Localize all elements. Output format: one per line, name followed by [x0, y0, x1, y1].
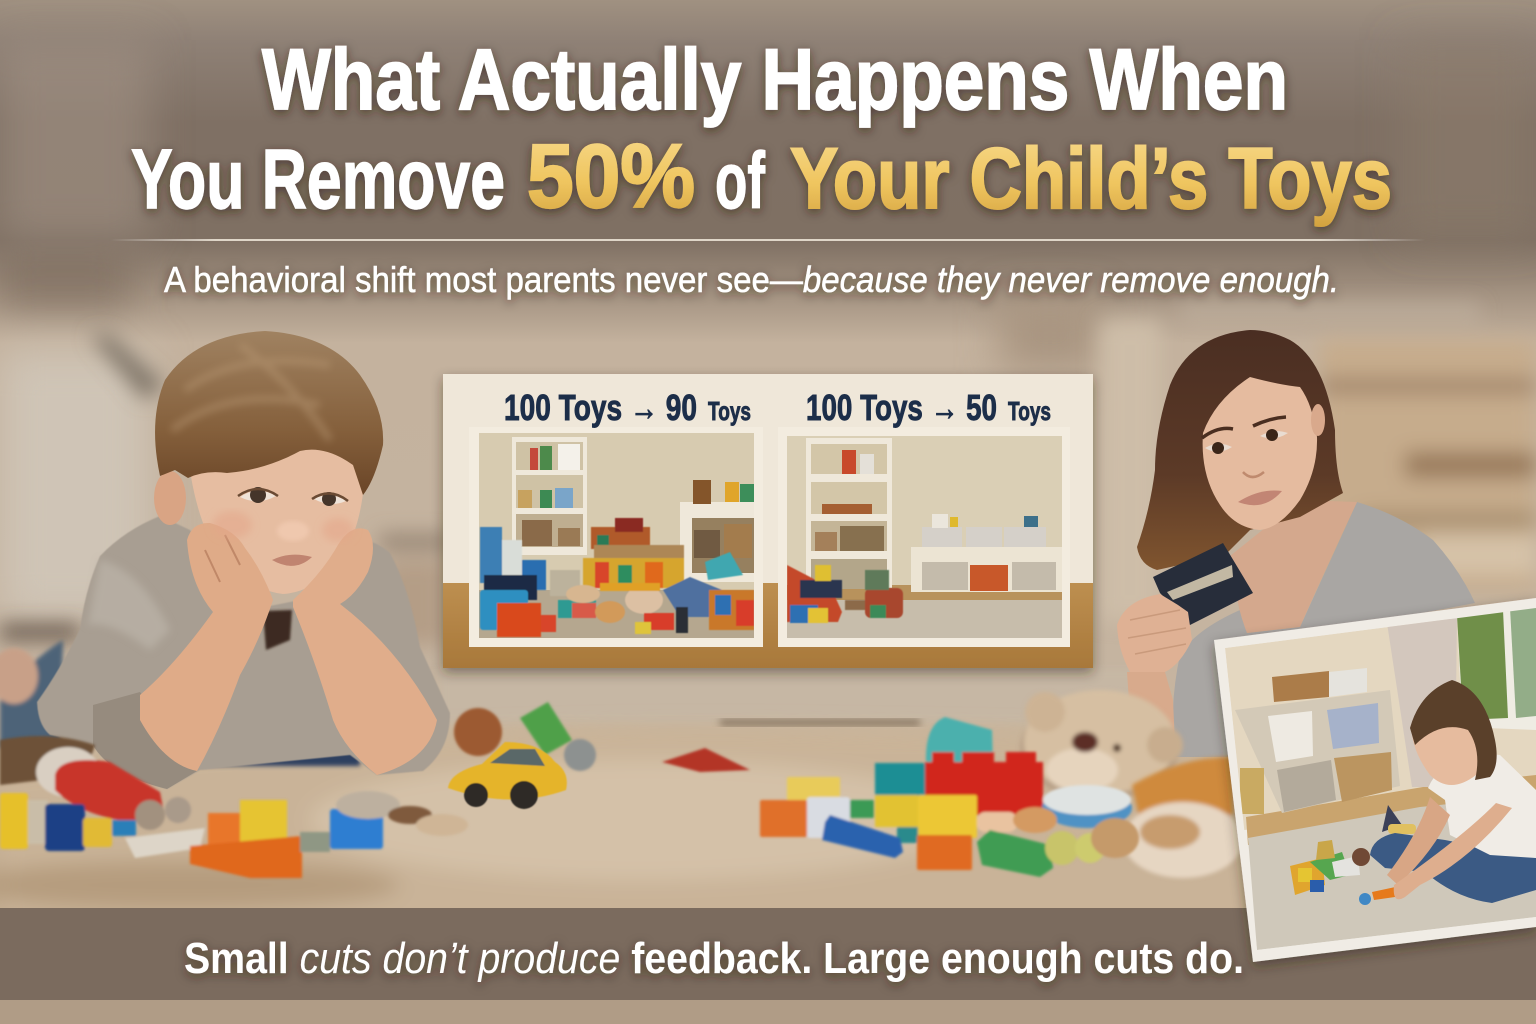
smaller toy pile: [787, 565, 903, 623]
boy's nose and mouth: [272, 521, 312, 566]
low white cabinet: [680, 480, 754, 582]
title line 2: 50%: [527, 127, 695, 227]
heading: 100 toys to 50 toys: Toys: [1008, 396, 1051, 426]
woman's brows and eyes: [1202, 417, 1288, 454]
blurred foreground toys left: [0, 702, 750, 878]
stacked orange and yellow bricks: [240, 800, 287, 844]
carpet: [1248, 795, 1536, 950]
boy's eyes: [238, 487, 348, 506]
bottom caption band: [0, 908, 1536, 1000]
boy's hair: [155, 331, 383, 495]
woman's grey top: [1172, 502, 1475, 757]
woman's ear: [1311, 404, 1325, 436]
basket beside shelf: [1240, 768, 1264, 814]
comparison panel: [443, 374, 1093, 668]
girl: [1370, 680, 1536, 903]
heading: 100 toys to 50 toys: 100 Toys → 50: [806, 387, 997, 428]
credit card: [1153, 543, 1253, 625]
woman's neck and chest: [1225, 500, 1357, 633]
heading: 100 toys to 90 toys: Toys: [708, 396, 751, 426]
toy bricks pile: [760, 717, 1139, 877]
boy's forearms and hands: [140, 523, 437, 775]
title line 2: [131, 127, 1392, 227]
bottom strip: [0, 1000, 1536, 1024]
wooden floor: [1246, 775, 1536, 845]
storage cubbies with boxes: [911, 514, 1062, 592]
subtitle: A behavioral shift most parents never see—because they never remove enough.: [164, 259, 1339, 300]
title line 2: You Remove: [131, 132, 505, 226]
curtain: [1387, 614, 1457, 787]
woman's face: [1203, 377, 1317, 530]
tall white bookshelf: [806, 438, 892, 589]
title line 2: Your Child’s Toys: [790, 131, 1392, 227]
boy's cheek shading: [212, 511, 354, 542]
right shelves blur: [0, 302, 1536, 645]
small doll and cookies: [336, 791, 400, 819]
title: [131, 32, 1392, 227]
inset photo of girl playing: [1214, 598, 1536, 962]
heading: 100 toys to 90 toys: 100 Toys → 90: [504, 387, 697, 428]
storage shelf: [1235, 690, 1400, 813]
boy's t-shirt: [37, 516, 450, 789]
orange plush and cream paw: [1123, 757, 1243, 878]
boy resting chin on hands: [0, 331, 450, 789]
woman's hand: [1117, 594, 1192, 672]
small toys on carpet: [1290, 805, 1416, 905]
distant toys: [454, 708, 502, 756]
blurred foreground toys right with teddy bear: [760, 690, 1243, 878]
bottom caption: Small cuts don’t produce feedback. Large enough cuts do.: [184, 934, 1244, 983]
woman's hair: [1137, 330, 1343, 570]
panel wooden floor strip: [443, 583, 1093, 668]
boy's face: [186, 440, 365, 594]
yellow toy car: [448, 742, 567, 809]
carpet floor: [0, 668, 1536, 1024]
boxes on shelf: [1272, 668, 1367, 702]
woman's nose and mouth: [1238, 472, 1282, 505]
teddy bear: [1020, 690, 1183, 800]
title divider: [110, 239, 1426, 241]
tall white bookshelf: [512, 437, 587, 555]
photo: 100 toys to 50 toys: [778, 427, 1070, 647]
woman looking at credit card: [1117, 330, 1475, 757]
room wall: [1225, 608, 1536, 830]
title line 2: of: [715, 136, 765, 225]
boy's ear: [154, 471, 186, 525]
stuffed toys and bricks at the left: [0, 736, 95, 785]
woman's arm: [1127, 672, 1175, 745]
pile of colorful toys: [480, 518, 754, 637]
window with plants: [1457, 604, 1536, 730]
blue brick: [330, 809, 383, 849]
boy's legs and feet: [0, 640, 360, 766]
photo: 100 toys to 90 toys: [469, 427, 763, 647]
title line 1: What Actually Happens When: [262, 32, 1288, 128]
